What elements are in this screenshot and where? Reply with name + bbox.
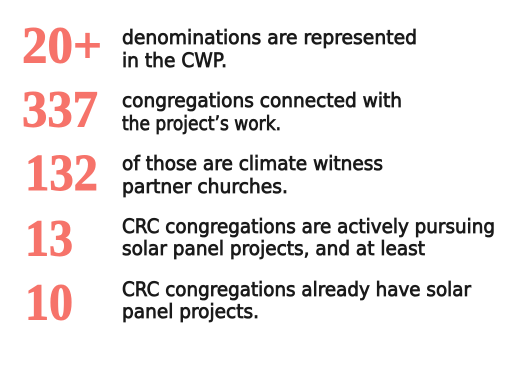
description: have solar (122, 278, 472, 323)
description: denominations: denominations are represented (122, 26, 417, 49)
number: 10: 10 (25, 274, 73, 332)
stat row: 13 pursuing solar (25, 210, 495, 268)
description: congregations: the project’s work. (122, 112, 281, 135)
description: partner churches: of those are climate witness (122, 152, 383, 175)
description: partner churches: partner churches. (122, 175, 288, 198)
description: pursuing solar: solar panel projects, and at least (122, 237, 425, 260)
description: have solar: CRC congregations already have solar (122, 278, 472, 301)
description: denominations (122, 26, 417, 72)
stat row: 337 congregations (22, 82, 402, 138)
stat row: 132 partner churches (25, 145, 383, 202)
description: congregations (122, 89, 402, 135)
stat row: 10 have solar (25, 274, 472, 332)
stat row: 20+ denominations (22, 18, 417, 74)
number: 13: 13 (25, 210, 73, 268)
description: denominations: in the CWP. (122, 49, 227, 72)
number: 20+: 20+ (22, 18, 102, 74)
description: pursuing solar (122, 215, 495, 260)
description: congregations: congregations connected with (122, 89, 402, 112)
number: 337: 337 (22, 82, 98, 138)
description: partner churches (122, 152, 383, 198)
number: 132: 132 (25, 145, 98, 202)
description: have solar: panel projects. (122, 300, 259, 323)
